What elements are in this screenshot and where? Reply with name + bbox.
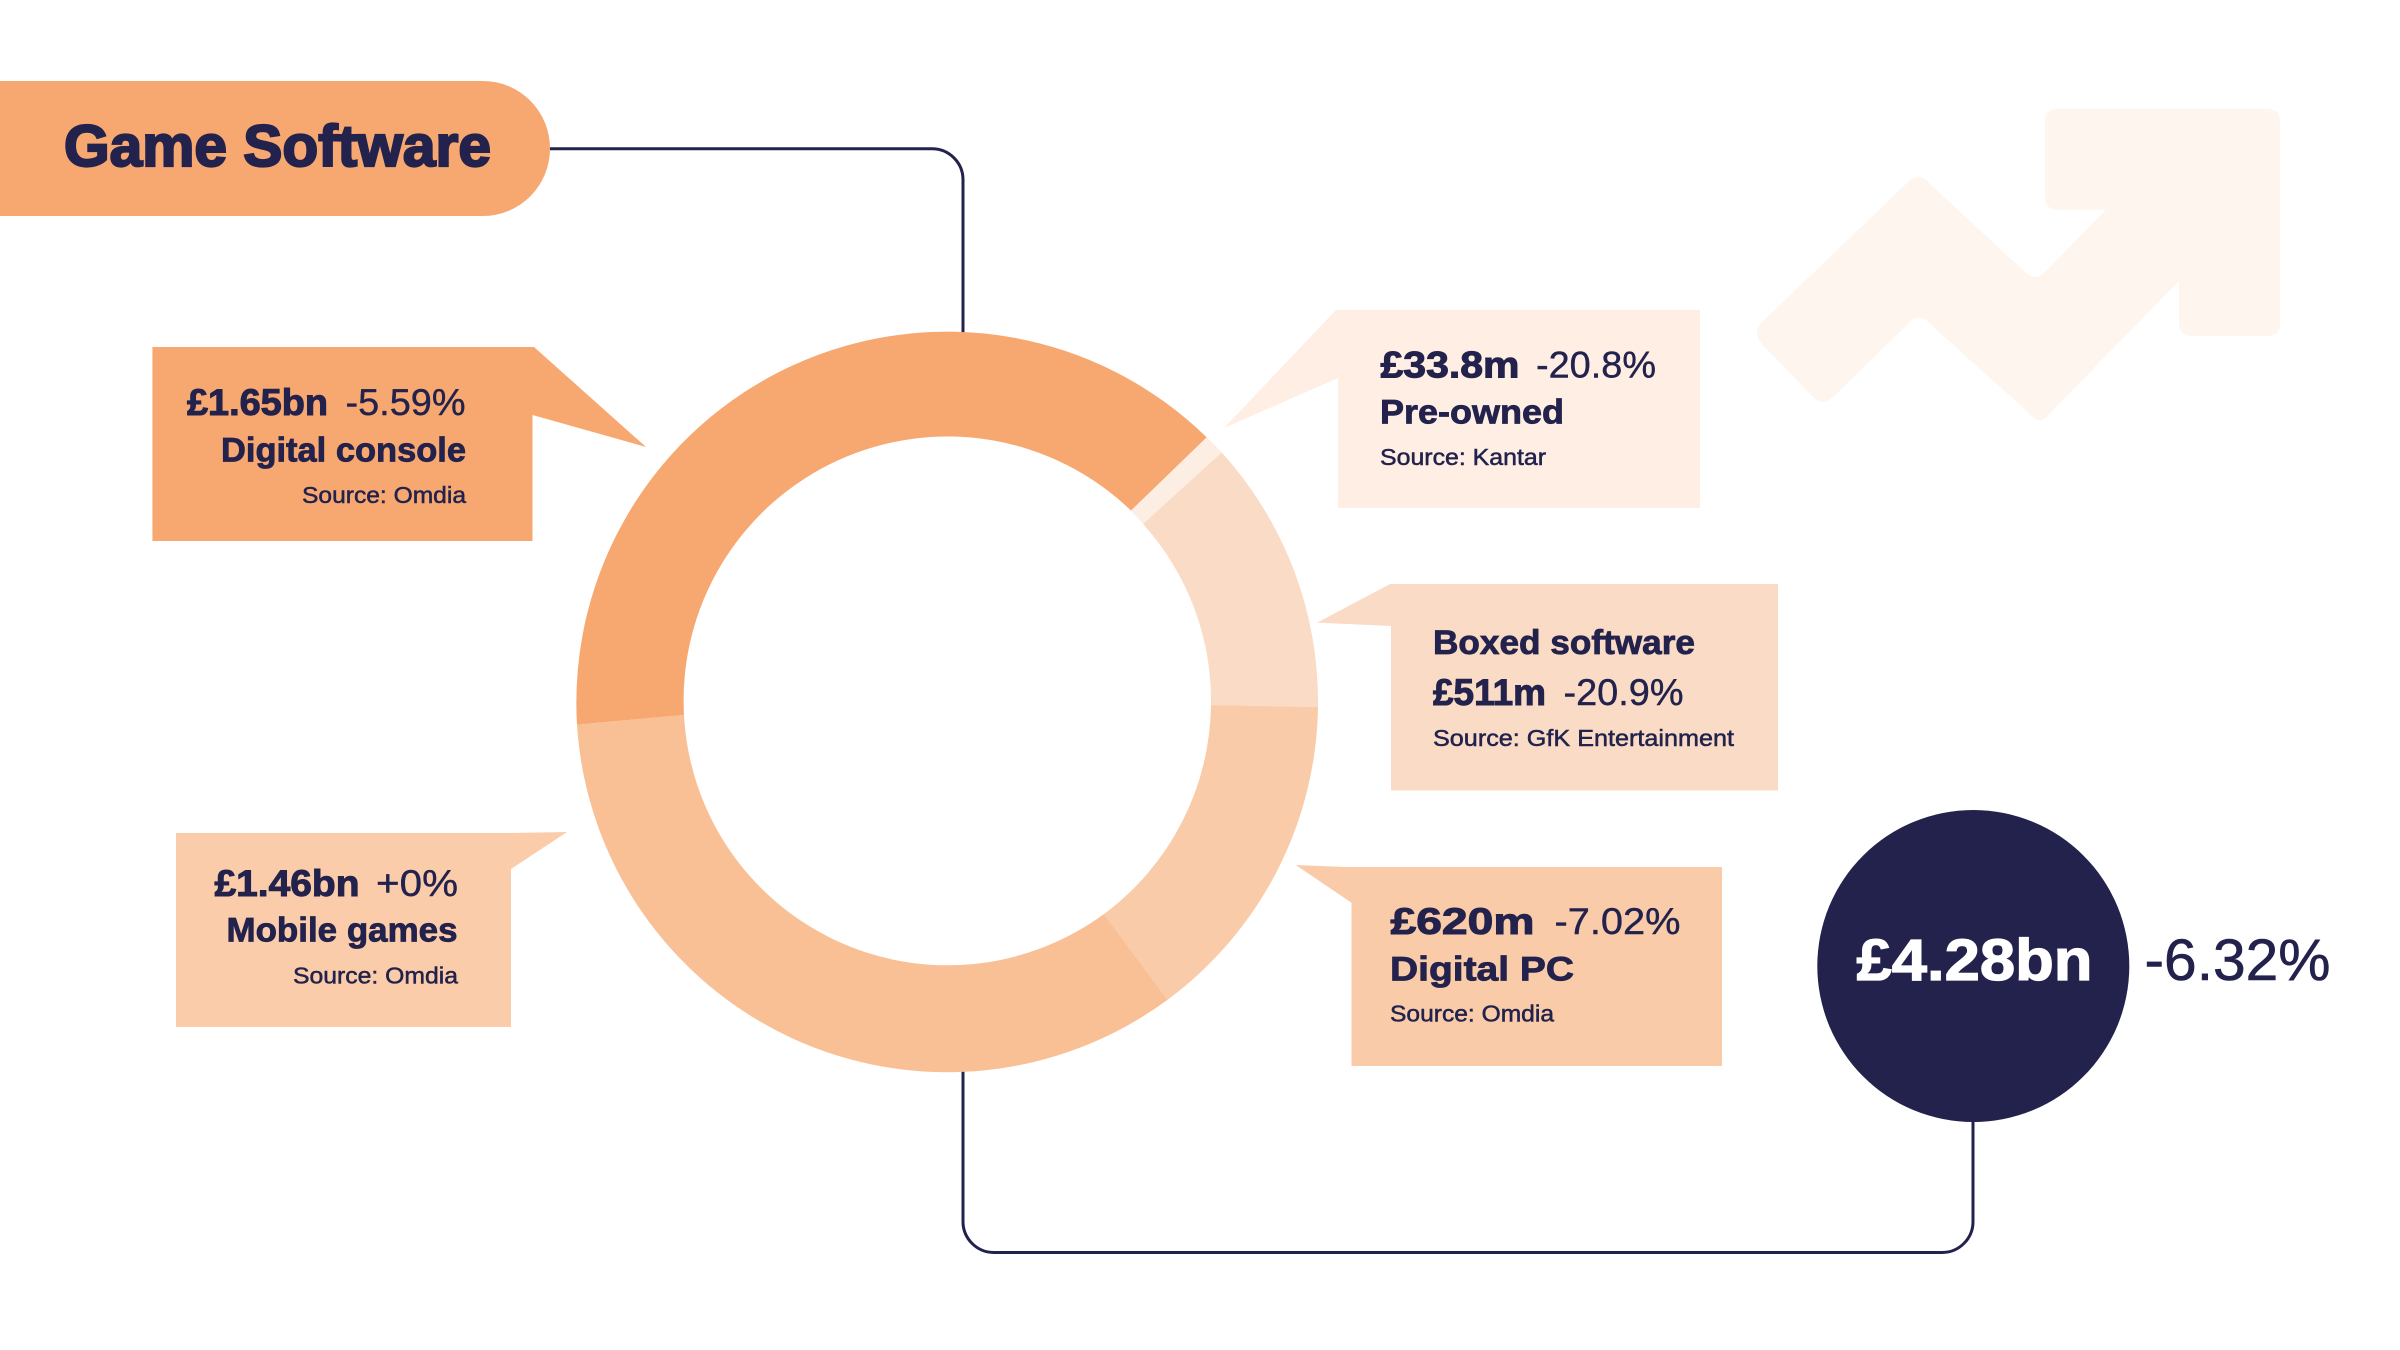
slice: digital console: [576, 332, 1207, 725]
category name: Boxed software: [1433, 624, 1695, 662]
source: Source: Omdia: [293, 962, 458, 988]
slice: boxed software: [1143, 452, 1318, 707]
callout: digital console: [152, 347, 646, 541]
value: £1.65bn: [187, 382, 328, 423]
change: -7.02%: [1554, 901, 1680, 942]
title text: Game Software: [64, 114, 491, 179]
connector: donut to total: [963, 1070, 1973, 1252]
change: -5.59%: [346, 382, 466, 423]
slice: digital PC: [1104, 705, 1318, 1000]
category name: Mobile games: [226, 912, 458, 950]
slice: pre-owned: [1131, 437, 1222, 524]
category name: Pre-owned: [1380, 394, 1564, 432]
total circle: [1817, 810, 2129, 1122]
callout: pre-owned: [1224, 310, 1700, 508]
change: +0%: [376, 863, 458, 904]
source: Source: Omdia: [302, 482, 466, 508]
value: £620m: [1390, 901, 1534, 942]
slice: mobile games: [577, 715, 1168, 1072]
value: £511m: [1433, 672, 1546, 713]
source: Source: GfK Entertainment: [1433, 725, 1735, 751]
category name: Digital console: [221, 432, 466, 470]
source: Source: Kantar: [1380, 444, 1546, 470]
total change: -6.32%: [2144, 928, 2330, 993]
value: £33.8m: [1380, 345, 1520, 386]
change: -20.9%: [1564, 672, 1684, 713]
category name: Digital PC: [1390, 951, 1574, 989]
donut chart: [576, 332, 1318, 1072]
value: £1.46bn: [214, 863, 360, 904]
callout: mobile games: [176, 832, 567, 1027]
title pill: [0, 81, 550, 216]
connector: title to donut: [550, 149, 963, 334]
icon: upward trend arrow: [1757, 109, 2280, 420]
callout: boxed software: [1317, 584, 1778, 790]
change: -20.8%: [1536, 345, 1656, 386]
callout: digital PC: [1296, 865, 1722, 1066]
total value: £4.28bn: [1856, 928, 2092, 993]
source: Source: Omdia: [1390, 1000, 1554, 1026]
